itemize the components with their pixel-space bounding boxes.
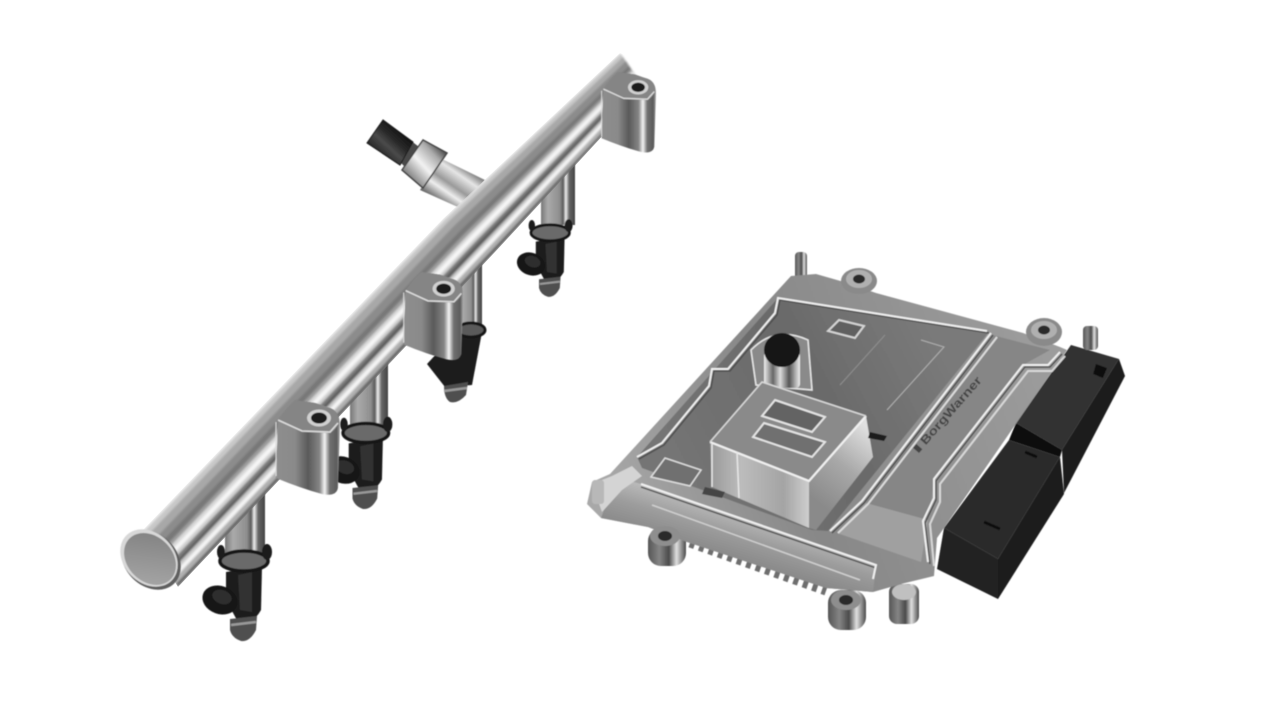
main rail tube — [143, 53, 645, 587]
lower right panel — [837, 503, 928, 562]
metal base plate — [587, 274, 1067, 592]
box slot lower — [753, 423, 825, 457]
logo strip panel — [866, 335, 1050, 520]
black connector housing — [937, 345, 1125, 599]
mounting bracket 2 — [404, 272, 463, 360]
rib shadows — [639, 300, 1062, 568]
injector 4 — [514, 150, 575, 297]
box slot upper — [762, 400, 825, 432]
front ear tops and holes — [592, 480, 916, 610]
mounting bracket 3 — [602, 72, 656, 153]
rail end cap — [109, 518, 193, 602]
injector 1 — [198, 470, 272, 641]
raised electronics box — [710, 382, 873, 530]
fuel rail assembly — [109, 53, 656, 641]
sensor port — [751, 333, 812, 390]
front edge band — [601, 477, 876, 592]
mounting bracket 1 — [276, 400, 340, 495]
polished left corner — [592, 466, 642, 512]
top mounting ears — [841, 268, 1062, 346]
small recess details — [651, 432, 887, 498]
fuel inlet with pressure sensor — [367, 120, 485, 208]
heat sink fins — [690, 543, 826, 591]
product illustration: fuel rail and ECU — [120, 54, 1126, 642]
BorgWarner logo text — [911, 373, 985, 455]
engine control unit — [587, 252, 1125, 630]
injector 3 — [427, 255, 485, 402]
BorgWarner logo text: BorgWarner — [917, 373, 985, 447]
upper cover panel — [637, 298, 989, 531]
injector 2 — [322, 350, 392, 509]
lower ears and studs — [648, 252, 1098, 630]
raised ribs — [637, 298, 1065, 580]
